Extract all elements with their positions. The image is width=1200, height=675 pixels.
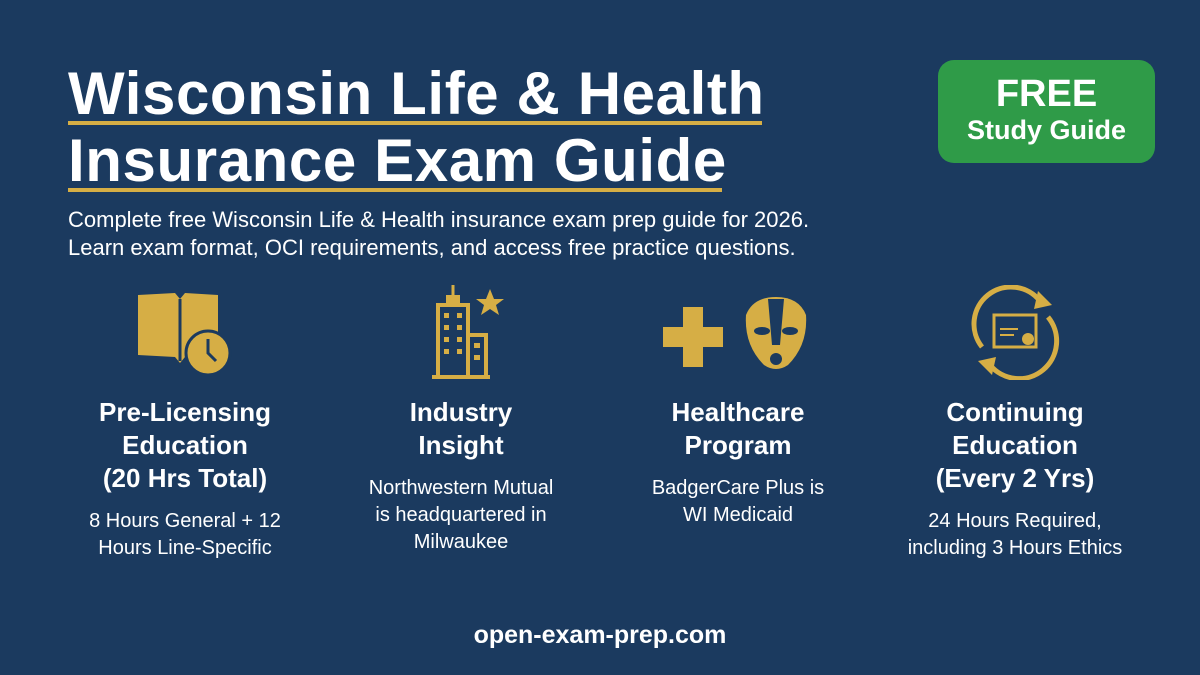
column: healthcare (652, 297, 824, 526)
column: continuing education: including 3 Hours Ethics (908, 537, 1122, 559)
subtitle: Complete free Wisconsin Life & Health insurance exam prep guide for 2026. (68, 207, 809, 232)
column: continuing education: (Every 2 Yrs) (936, 463, 1094, 493)
badge: free study guide: Study Guide (967, 115, 1126, 145)
column: industry insight (369, 285, 553, 553)
column: continuing education: Education (952, 430, 1078, 460)
column: pre-licensing: Hours Line-Specific (98, 537, 272, 559)
badge: free study guide: FREE (996, 73, 1097, 115)
column: industry insight: Northwestern Mutual (369, 477, 553, 499)
column: continuing education: Continuing (946, 397, 1084, 427)
title: Insurance Exam Guide (68, 127, 727, 194)
column: healthcare: BadgerCare Plus is (652, 477, 824, 499)
column: continuing education: 24 Hours Required, (928, 510, 1102, 532)
icon: book with clock (138, 293, 228, 374)
title: Wisconsin Life & Health (68, 60, 765, 127)
badge: free study guide (938, 60, 1155, 163)
icon: certificate with cycle arrows (972, 285, 1060, 380)
column: healthcare: Program (685, 430, 791, 460)
subtitle (68, 207, 809, 260)
column: pre-licensing (89, 293, 281, 559)
subtitle: Learn exam format, OCI requirements, and access free practice questions. (68, 235, 796, 260)
column: industry insight: Industry (410, 397, 512, 427)
column: pre-licensing: Education (122, 430, 248, 460)
column: industry insight: Insight (418, 430, 504, 460)
column: pre-licensing: 8 Hours General + 12 (89, 510, 281, 532)
footer url: open-exam-prep.com (474, 621, 726, 649)
column: healthcare: Healthcare (672, 397, 804, 427)
column: industry insight: is headquartered in (375, 504, 547, 526)
column: industry insight: Milwaukee (414, 531, 508, 553)
title (68, 60, 765, 194)
column: pre-licensing: (20 Hrs Total) (103, 463, 267, 493)
column: continuing education (908, 285, 1122, 559)
icon: building with star (432, 285, 504, 379)
column: healthcare: WI Medicaid (683, 504, 793, 526)
icon: cross and badger (663, 297, 806, 369)
column: pre-licensing: Pre-Licensing (99, 397, 271, 427)
